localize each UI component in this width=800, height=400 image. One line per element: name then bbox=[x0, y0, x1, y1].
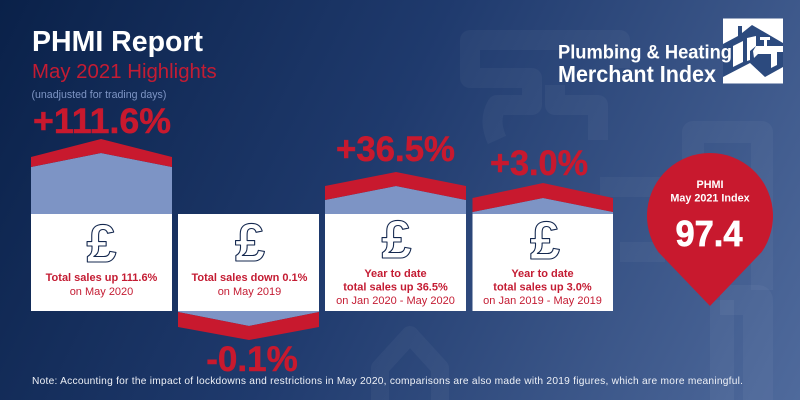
caption: Total sales down 0.1% bbox=[192, 272, 308, 284]
caption: on May 2020 bbox=[70, 286, 133, 298]
logo bbox=[558, 18, 783, 87]
bar cap bbox=[325, 172, 466, 200]
bar cap bbox=[31, 139, 172, 167]
caption: total sales up 36.5% bbox=[343, 282, 448, 294]
value: +36.5% bbox=[336, 130, 455, 169]
bar bbox=[31, 153, 172, 214]
value: +111.6% bbox=[33, 102, 171, 141]
bar cap bbox=[178, 312, 319, 340]
footnote: Note: Accounting for the impact of lockdowns and restrictions in May 2020, comparisons are also made with 2019 figures, which are more meaningful. bbox=[32, 376, 743, 387]
logo text: Plumbing & Heating bbox=[558, 42, 732, 64]
caption: Total sales up 111.6% bbox=[46, 272, 158, 284]
note: unadjusted: (unadjusted for trading days) bbox=[32, 89, 166, 101]
background pipes bbox=[380, 40, 762, 400]
card bbox=[325, 214, 466, 311]
bar bbox=[325, 186, 466, 214]
panel: year to date up 3.0% bbox=[472, 144, 613, 311]
title: PHMI Report bbox=[32, 26, 204, 58]
icon: pound: £ bbox=[235, 213, 265, 273]
caption: Year to date bbox=[511, 268, 574, 280]
card bbox=[178, 214, 319, 311]
caption: total sales up 3.0% bbox=[493, 282, 592, 294]
index pin bbox=[647, 153, 773, 306]
bar bbox=[178, 311, 319, 326]
card bbox=[31, 214, 172, 311]
caption: on May 2019 bbox=[218, 286, 281, 298]
pin label: May 2021 Index bbox=[670, 192, 750, 204]
panel: total sales up 111.6% bbox=[31, 102, 172, 311]
icon: pound: £ bbox=[530, 211, 560, 271]
logo mark bbox=[723, 18, 783, 84]
panel: year to date up 36.5% bbox=[325, 130, 466, 311]
card bbox=[472, 214, 613, 311]
value: +3.0% bbox=[490, 144, 588, 183]
icon: pound: £ bbox=[381, 210, 412, 270]
bar bbox=[472, 198, 613, 214]
caption: Year to date bbox=[364, 268, 427, 280]
caption: on Jan 2020 - May 2020 bbox=[336, 295, 455, 307]
logo: Merchant Index bbox=[558, 61, 716, 87]
subtitle: May 2021 Highlights bbox=[32, 61, 217, 83]
index value: 97.4 bbox=[676, 213, 742, 254]
value: -0.1% bbox=[206, 340, 298, 379]
panel: total sales down 0.1% bbox=[178, 213, 319, 379]
icon: pound: £ bbox=[86, 214, 117, 274]
bar cap bbox=[472, 183, 613, 212]
pin label: PHMI bbox=[696, 179, 724, 191]
caption: on Jan 2019 - May 2019 bbox=[483, 295, 602, 307]
pin shape bbox=[647, 153, 773, 306]
